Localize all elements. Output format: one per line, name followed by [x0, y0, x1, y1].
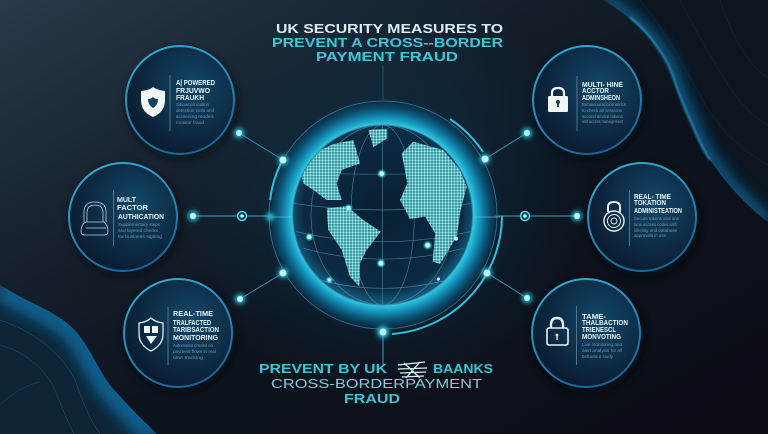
continents [302, 129, 467, 287]
panel: multi-factor access authentication [533, 46, 645, 160]
icon: shield [141, 87, 165, 117]
title [272, 21, 504, 64]
panel: AI powered fraud prevention [126, 46, 238, 160]
connector lines [193, 66, 577, 366]
text: real-time token authentication: REAL- TIME [634, 194, 671, 201]
text: real-time token authentication: TOKATION [634, 200, 666, 207]
text: multi factor authentication: AUTHICATION [118, 214, 164, 221]
icon: solid padlock [548, 88, 568, 112]
text: real-time transaction monitoring: Automated checks on [173, 343, 214, 348]
text: real-time token authentication: Secure tokens and one [634, 216, 680, 221]
text: transaction monitoring: alert analysis for all [582, 348, 622, 353]
connector nodes [188, 128, 582, 338]
bottom left wave [0, 285, 160, 434]
text: multi factor authentication: and layered checks [118, 228, 158, 233]
text: real-time token authentication: identity and database [634, 228, 678, 233]
text: real-time transaction monitoring [173, 311, 219, 360]
text: multi-factor access authentication: ADMINSHEON [582, 95, 620, 102]
text: transaction monitoring: TAME- [582, 314, 607, 321]
text: real-time transaction monitoring: time tracking [173, 355, 204, 360]
text: transaction monitoring: TRIENESCL [582, 327, 617, 334]
text: transaction monitoring: MONVOTING [582, 334, 621, 341]
text: transaction monitoring: Live monitoring and [582, 342, 623, 347]
text: AI powered fraud prevention: A| POWERED [176, 80, 215, 87]
icon: garbled emblem [398, 362, 427, 378]
bottom caption: CROSS-BORDERPAYMENT [271, 376, 482, 391]
panel: multi factor authentication [69, 163, 181, 277]
text: real-time token authentication: ADMINISTEATION [634, 208, 682, 215]
text: real-time token authentication: time access codes with [634, 222, 678, 227]
text: AI powered fraud prevention: screening models [176, 114, 214, 119]
text: transaction monitoring [582, 314, 628, 359]
text: AI powered fraud prevention: detection tools and [176, 108, 215, 113]
text: multi factor authentication [117, 197, 164, 239]
top right wave [600, 0, 768, 225]
orbit rings [269, 101, 502, 334]
panel: transaction monitoring [532, 279, 644, 393]
text: AI powered fraud prevention: FRAUKH [176, 95, 204, 102]
bottom caption: BAANKS [433, 361, 493, 376]
text: real-time token authentication [634, 194, 682, 238]
text: multi-factor access authentication: to check all sessions [582, 108, 622, 113]
text: AI powered fraud prevention: monitor fraud [176, 120, 205, 125]
text: multi factor authentication: Supplementary steps [118, 222, 160, 227]
panel: real-time transaction monitoring [124, 279, 236, 393]
globe halo [265, 97, 501, 333]
title: UK SECURITY MEASURES TO [276, 21, 503, 36]
text: multi factor authentication: FACTOR [117, 205, 148, 212]
text: transaction monitoring: THALBACTION [582, 320, 628, 327]
text: multi factor authentication: for business signing [118, 234, 163, 239]
text: real-time transaction monitoring: TARIBSACTION [173, 327, 219, 334]
globe [265, 97, 502, 334]
bottom caption [259, 361, 493, 406]
icon: dial padlock [604, 202, 624, 231]
globe nodes [306, 170, 458, 283]
text: multi-factor access authentication: and access management [582, 119, 624, 124]
text: real-time transaction monitoring: payment flows in real [173, 349, 216, 354]
title: PAYMENT FRAUD [316, 49, 458, 64]
graticule [293, 125, 473, 305]
text: real-time transaction monitoring: TRALFACTED [173, 320, 211, 327]
text: multi-factor access authentication: second device tokens [582, 114, 623, 119]
icon: outline padlock [81, 202, 108, 235]
text: real-time token authentication: approvals in use [634, 233, 667, 238]
text: multi-factor access authentication: ACCTOR [582, 88, 609, 95]
sphere and map [293, 125, 473, 305]
icon: shield with panels [139, 318, 163, 351]
text: real-time transaction monitoring: REAL-TIME [173, 311, 213, 318]
text: multi-factor access authentication [582, 82, 626, 124]
text: multi-factor access authentication: MULTI- HINE [582, 82, 623, 89]
text: multi-factor access authentication: Behavioural biometrics [582, 102, 626, 107]
text: AI powered fraud prevention [176, 80, 215, 125]
title: PREVENT A CROSS--BORDER [272, 35, 504, 50]
panel: real-time token authentication [588, 163, 700, 277]
text: transaction monitoring: behaviour study [582, 354, 614, 359]
text: real-time transaction monitoring: MONITORING [173, 335, 219, 342]
text: AI powered fraud prevention: FRJUVWO [176, 88, 211, 95]
text: multi factor authentication: MULT [117, 197, 137, 204]
bottom caption: FRAUD [344, 391, 400, 406]
text: AI powered fraud prevention: Sdvanced mation [176, 102, 210, 107]
bottom caption: PREVENT BY UK [259, 361, 388, 376]
icon: outline padlock [547, 318, 568, 345]
